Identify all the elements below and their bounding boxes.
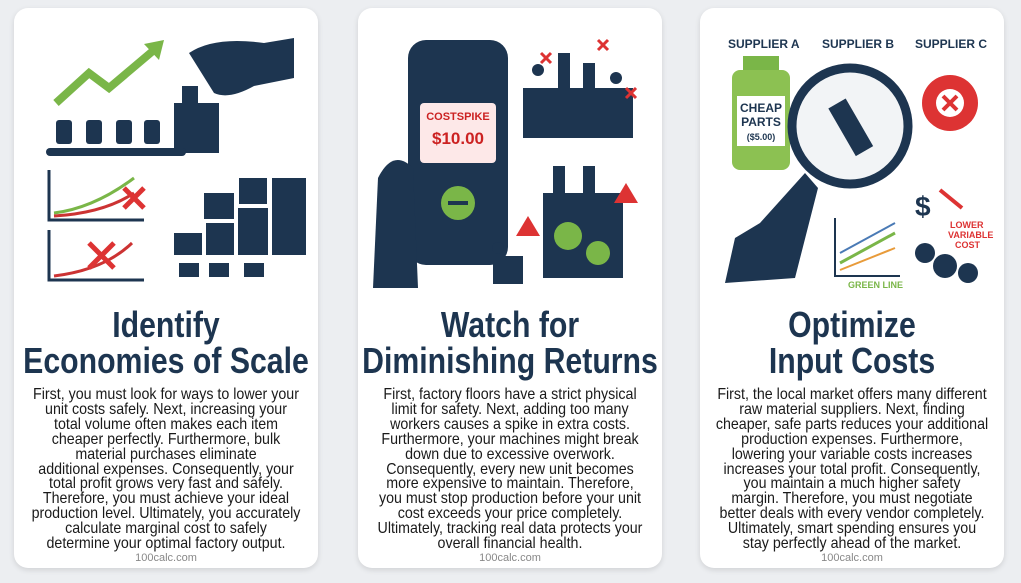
icon: hand and machine <box>174 38 294 153</box>
icon: magnifier with screw <box>725 68 908 283</box>
supplier labels: SUPPLIER B <box>822 37 894 51</box>
heading: Identify <box>112 304 220 345</box>
heading <box>769 304 935 381</box>
supplier labels: SUPPLIER C <box>915 37 987 51</box>
heading: Watch for <box>441 304 579 345</box>
icon: conveyor with bottles <box>46 120 186 156</box>
icon: cheap parts bottle <box>732 56 790 170</box>
text block: you must stop production before your unit <box>379 490 641 507</box>
icon: boxes stack <box>174 178 306 277</box>
icon: factory with workers <box>523 53 633 138</box>
icon: hand holding meter: $10.00 <box>432 129 484 148</box>
text block: First, you must look for ways to lower your <box>33 386 299 403</box>
icon: dollar and lower cost: LOWER <box>950 220 984 230</box>
text block: material purchases eliminate <box>75 446 257 463</box>
panel: input costs <box>700 8 1004 568</box>
icon: dollar and lower cost: VARIABLE <box>948 230 993 240</box>
text block: overall financial health. <box>438 535 582 552</box>
text block: you maintain a much higher safety <box>744 475 960 492</box>
icon: hand holding meter: COSTSPIKE <box>426 111 490 123</box>
text block: Ultimately, smart spending ensures you <box>728 520 976 537</box>
panel: economies of scale <box>14 8 318 568</box>
icon: dollar and lower cost: $ <box>915 191 931 222</box>
text block: production level. Ultimately, you accurately <box>32 505 300 522</box>
text block: Ultimately, tracking real data protects your <box>378 520 642 537</box>
footer: 100calc.com <box>479 552 541 564</box>
icon: gears <box>915 243 978 283</box>
text block: calculate marginal cost to safely <box>65 520 267 537</box>
heading: Input Costs <box>769 340 935 381</box>
chart: green line <box>835 218 903 290</box>
supplier labels <box>728 37 987 51</box>
heading: Economies of Scale <box>23 340 309 381</box>
text block: margin. Therefore, you must negotiate <box>731 490 973 507</box>
text block: total profit grows very fast and safely. <box>49 475 283 492</box>
text block: workers causes a spike in extra costs. <box>390 416 630 433</box>
text block: limit for safety. Next, adding too many <box>391 401 629 418</box>
panel: diminishing returns <box>358 8 662 568</box>
text block: Furthermore, your machines might break <box>381 431 639 448</box>
text block: raw material suppliers. Next, finding <box>739 401 965 418</box>
heading: Optimize <box>788 304 916 345</box>
text block: Consequently, every new unit becomes <box>386 461 634 478</box>
icon: cheap parts bottle: CHEAP <box>740 101 782 115</box>
footer: 100calc.com <box>135 552 197 564</box>
icon: dollar and lower cost <box>915 190 993 250</box>
illustration: conveyor and charts <box>46 38 306 282</box>
text block: production expenses. Furthermore, <box>741 431 963 448</box>
icon: machine with gears <box>492 166 638 284</box>
text block <box>716 386 988 552</box>
icon: cheap parts bottle: ($5.00) <box>747 132 775 142</box>
icon: green up arrow <box>56 40 164 103</box>
text block: cheaper, safe parts reduces your additional <box>716 416 988 433</box>
text block: determine your optimal factory output. <box>46 535 286 552</box>
text block <box>32 386 300 552</box>
chart: cost curves <box>49 170 144 280</box>
icon: hand holding meter <box>373 40 508 288</box>
icon: red gear x <box>922 75 978 131</box>
icon: dollar and lower cost: COST <box>955 240 981 250</box>
text block: First, the local market offers many different <box>717 386 987 403</box>
text block: increases your total profit. Consequently, <box>724 461 980 478</box>
text block: total volume often makes each item <box>54 416 278 433</box>
text block: down due to excessive overwork. <box>405 446 615 463</box>
supplier labels: SUPPLIER A <box>728 37 800 51</box>
illustration: device and factory <box>373 39 638 288</box>
text block: additional expenses. Consequently, your <box>38 461 294 478</box>
heading: Diminishing Returns <box>362 340 658 381</box>
icon: cheap parts bottle: PARTS <box>741 115 781 129</box>
text block: unit costs safely. Next, increasing your <box>45 401 287 418</box>
text block <box>378 386 642 552</box>
text block: stay perfectly ahead of the market. <box>743 535 961 552</box>
illustration: suppliers and magnifier <box>725 37 994 290</box>
text block: cheaper perfectly. Furthermore, bulk <box>52 431 280 448</box>
text block: lowering your variable costs increases <box>732 446 972 463</box>
footer: 100calc.com <box>821 552 883 564</box>
text block: cost exceeds your price completely. <box>398 505 622 522</box>
chart: green line: GREEN LINE <box>848 280 903 290</box>
text block: better deals with every vendor completely. <box>720 505 984 522</box>
text block: First, factory floors have a strict physical <box>383 386 637 403</box>
text block: more expensive to maintain. Therefore, <box>386 475 634 492</box>
heading <box>362 304 658 381</box>
heading <box>23 304 309 381</box>
text block: Therefore, you must achieve your ideal <box>43 490 289 507</box>
